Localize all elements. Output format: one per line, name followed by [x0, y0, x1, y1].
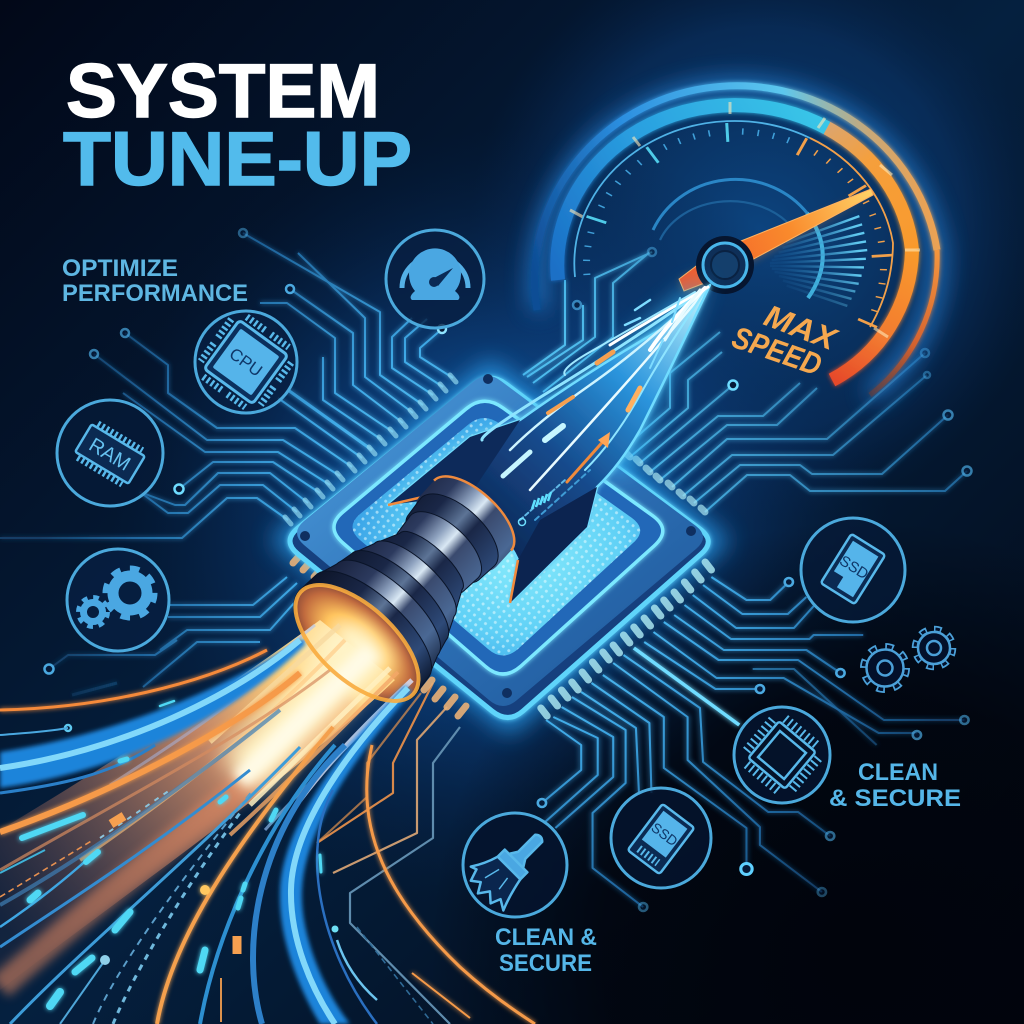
- nozzle opening: [276, 565, 438, 721]
- chip pins upper right: [626, 453, 705, 512]
- nozzle rim: [276, 565, 438, 721]
- chip glow: [270, 360, 730, 735]
- chip plate: [297, 376, 703, 706]
- outer gauge arc: [535, 86, 937, 395]
- exhaust flame: [0, 620, 395, 990]
- fuselage streaks: [482, 287, 708, 520]
- inner tick arc: [574, 121, 893, 327]
- circuit traces: upper left: [0, 233, 453, 695]
- speedometer gauge: [535, 86, 937, 395]
- collar: [403, 463, 527, 585]
- icon: gears outline: [864, 629, 953, 690]
- icon: chip outline: [734, 707, 830, 803]
- exhaust streams: [0, 620, 535, 1024]
- label: max speed: [728, 298, 843, 383]
- label: optimize performance: [62, 255, 248, 307]
- icon: ram: [57, 400, 163, 506]
- orange sweeping arc: [367, 745, 535, 1024]
- label: clean and secure bottom: [495, 924, 597, 977]
- large blue lower stream: [280, 685, 412, 1024]
- needle: [679, 189, 873, 292]
- chip pins upper left: [285, 375, 456, 524]
- dashed lane markers: [93, 790, 253, 1024]
- large blue upper stream: [0, 638, 306, 788]
- label: optimize performance: OPTIMIZE: [62, 255, 178, 282]
- icon: ram: RAM: [85, 434, 134, 476]
- title: SYSTEM: [66, 49, 380, 134]
- light dashes: [22, 701, 321, 1006]
- mounting holes: [300, 374, 696, 698]
- trace terminals: upper: [44, 229, 972, 731]
- label: clean and secure right: & SECURE: [829, 785, 961, 812]
- label: clean and secure right: [829, 759, 961, 812]
- gauge hub: [696, 236, 754, 294]
- chip base: [290, 378, 708, 718]
- icon: ssd lower: [611, 788, 711, 888]
- chip pins lower right: [541, 562, 711, 716]
- light beam glow: [500, 280, 706, 470]
- chip inner ring: [334, 401, 663, 674]
- icon: gears: [67, 549, 169, 651]
- lower orange stream: [157, 727, 333, 1024]
- icon: cpu: [194, 310, 298, 414]
- chip pins lower left: [293, 554, 466, 716]
- rocket fuselage and fins: [388, 285, 710, 603]
- icon: gauge: [386, 230, 484, 328]
- fin edges: [388, 493, 518, 603]
- label: max speed: SPEED: [728, 320, 826, 383]
- thin blue streams: [0, 745, 155, 793]
- flame streaks: [210, 625, 340, 742]
- title: TUNE-UP: [63, 117, 412, 202]
- label: max speed: MAX: [759, 298, 843, 358]
- upper orange stream: [0, 650, 267, 710]
- radial speed fan: [770, 216, 867, 306]
- cpu chip: [270, 360, 730, 735]
- small readout: [532, 492, 551, 509]
- label: clean and secure bottom: CLEAN &: [495, 924, 597, 951]
- trace terminals: lower right: [538, 578, 969, 911]
- label: clean and secure right: CLEAN: [858, 759, 938, 786]
- band separators: [570, 102, 920, 337]
- icon: ssd lower: SSD: [648, 819, 681, 849]
- icon: ssd upper: SSD: [836, 552, 872, 583]
- heat spreader dots: [352, 418, 640, 656]
- gauge colour band: [557, 105, 912, 380]
- label: optimize performance: PERFORMANCE: [62, 280, 248, 307]
- icon: ssd upper: [801, 518, 905, 622]
- label: clean and secure bottom: SECURE: [499, 950, 592, 977]
- icon: broom: [461, 813, 567, 917]
- circuit traces: upper right: [523, 252, 967, 512]
- fin shading: [388, 420, 520, 505]
- title: [63, 49, 412, 202]
- gauge glow: [538, 87, 937, 395]
- rocket nozzle: [274, 445, 546, 724]
- gauge ticks: [583, 123, 893, 327]
- circuit traces: lower right: [542, 577, 964, 907]
- rocket body: [388, 285, 710, 603]
- circuit traces: lower left orange: [317, 683, 460, 1024]
- orange dashes: [111, 816, 237, 1022]
- icon: cpu: CPU: [226, 344, 266, 381]
- inner speed arcs: [653, 179, 823, 298]
